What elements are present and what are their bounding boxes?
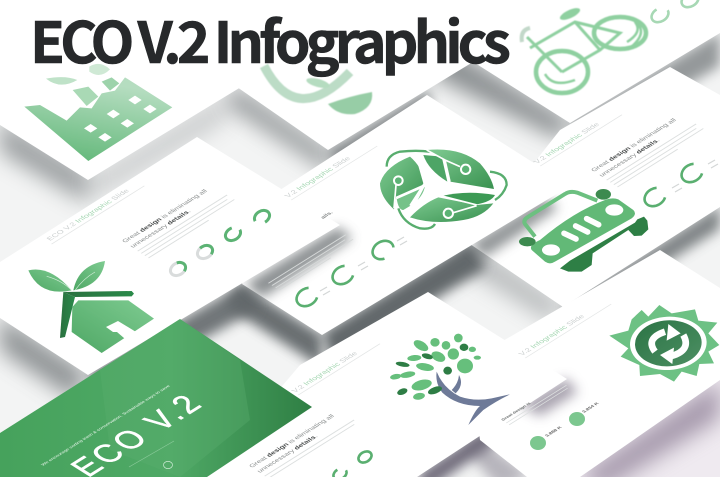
slide text: badge slide: Great design is (500, 401, 532, 421)
icon: tree (390, 334, 510, 425)
icon: bicycle (522, 6, 646, 93)
slide text: car slide (590, 113, 707, 187)
shadow of house slide on recycle slide (245, 227, 352, 298)
panel: tree slide (205, 292, 567, 477)
slide text: house slide: Great design is eliminating all (121, 188, 210, 244)
shadow of tree slide on badge slide (520, 378, 578, 416)
slide copy: house slide: ECO V.2 Infographic Slide (45, 188, 131, 242)
slide copy: car slide: V.2 Infographic Slide (532, 121, 601, 165)
stats: badge slide: 3.888 K (544, 425, 563, 437)
panel: factory slide (0, 0, 384, 180)
slide text: tree slide: unnecessary details. (256, 434, 320, 474)
slide copy: recycle slide (283, 141, 378, 200)
panel: house slide (0, 137, 340, 375)
icon: leaf house (28, 261, 154, 353)
cover button (164, 461, 172, 469)
slide text: badge slide (500, 381, 570, 425)
slide text: car slide: unnecessary details. (598, 138, 662, 178)
white centre (409, 157, 448, 208)
shadow of recycle slide on car slide (470, 197, 558, 258)
panel: recycle slide (242, 95, 570, 335)
slide copy: car slide (532, 109, 622, 166)
slide text: car slide: Great design is eliminating all (590, 117, 679, 173)
stats: badge slide (530, 401, 600, 450)
slide copy: badge slide (517, 299, 612, 358)
slide text: tree slide (248, 409, 358, 477)
icon: light bulb (264, 66, 372, 114)
panel: badge slide (470, 250, 720, 477)
slide fragment: recycle slide: ails. (320, 210, 335, 220)
slide text: recycle slide (268, 234, 357, 290)
icon: recycling badge (609, 305, 719, 382)
title: ECO V.2 Infographics (30, 0, 511, 80)
donut labels (320, 160, 718, 295)
icon: factory (24, 64, 172, 161)
panel: bike slide (440, 0, 720, 123)
cover tagline: We encourage sorting trash & conservation. Sustainable ways to save (40, 384, 172, 466)
slide text: house slide (121, 184, 238, 258)
slide copy: tree slide (290, 338, 380, 395)
purple tint bottom right (530, 360, 720, 477)
donut charts (168, 0, 706, 477)
panel: car slide (470, 67, 720, 307)
slide copy: tree slide: V.2 Infographic Slide (290, 350, 359, 394)
stats: badge slide: 3.854 K (581, 401, 600, 413)
slide copy: recycle slide: V.2 Infographic Slide (283, 155, 352, 199)
slide text: tree slide: Great design is eliminating all (248, 413, 337, 469)
panel: bulb slide (237, 0, 575, 150)
slide copy: badge slide: V.2 Infographic Slide (517, 313, 586, 357)
panel: cover slide (0, 319, 312, 477)
cover rule (129, 441, 174, 467)
icon: car (519, 189, 648, 272)
slide text: house slide: unnecessary details. (129, 209, 193, 249)
icon: recycling leaves (380, 149, 507, 229)
